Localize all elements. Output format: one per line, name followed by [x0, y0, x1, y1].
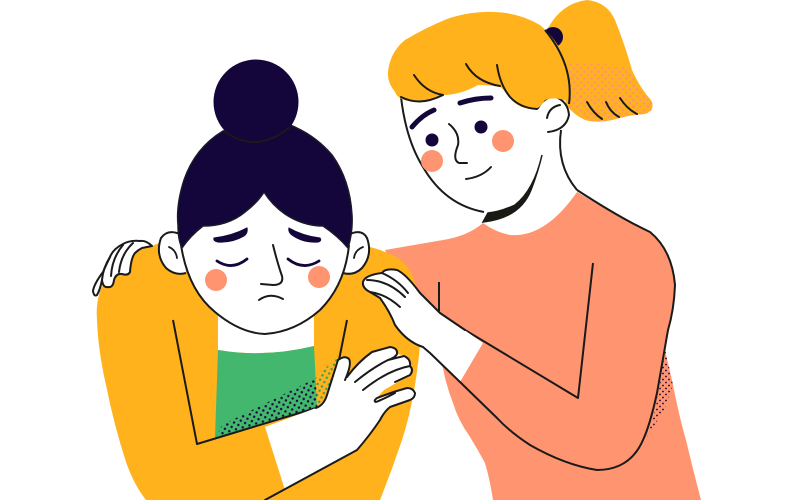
nose: [261, 245, 282, 285]
comforting woman: hand on far shoulder: [93, 241, 152, 296]
sleeve and shoulder lines: [460, 190, 675, 470]
comforting woman: forearm and hand on shoulder: [363, 269, 483, 382]
ear: [538, 97, 569, 132]
face: [181, 190, 349, 334]
comforting woman: neck: [483, 125, 577, 235]
fingers: [367, 273, 408, 307]
eyebrows: [214, 228, 321, 242]
green shirt: [215, 346, 317, 438]
comforting woman: ponytail: [543, 0, 653, 122]
jaw shadow: [483, 155, 542, 222]
nose: [449, 124, 467, 163]
sad friend: head: [159, 60, 369, 334]
smile: [466, 167, 491, 179]
hair outline right: [545, 30, 570, 104]
white sleeve: [265, 376, 387, 490]
hand outline and finger lines: [265, 347, 415, 500]
jacket shading dots: [316, 355, 338, 408]
ponytail strand lines: [587, 98, 637, 119]
finger lines: [102, 243, 133, 280]
hair strand lines: [401, 64, 537, 109]
sad friend: hand on chest: [265, 347, 415, 500]
sad friend: yellow jacket: [97, 200, 421, 500]
shirt shading dots: [216, 378, 318, 437]
hair tie: [543, 27, 563, 47]
ears: [159, 232, 186, 274]
eyebrows: [412, 98, 491, 127]
ponytail dot texture: [567, 62, 653, 122]
eyes: [426, 134, 438, 146]
hair bun: [214, 60, 298, 144]
hair: [178, 125, 352, 248]
jacket lines: [173, 320, 347, 444]
face: [401, 60, 565, 212]
frown: [259, 296, 283, 300]
sleeve shading dots: [647, 348, 673, 437]
white neck: [218, 300, 314, 353]
closed eyes: [217, 259, 319, 266]
cheeks: [205, 269, 227, 291]
fringe hair: [388, 12, 570, 109]
neck line: [560, 130, 577, 190]
cheeks: [421, 150, 443, 172]
comforting woman: head: [388, 12, 577, 222]
comforting woman: torso in coral sweater: [385, 190, 701, 500]
